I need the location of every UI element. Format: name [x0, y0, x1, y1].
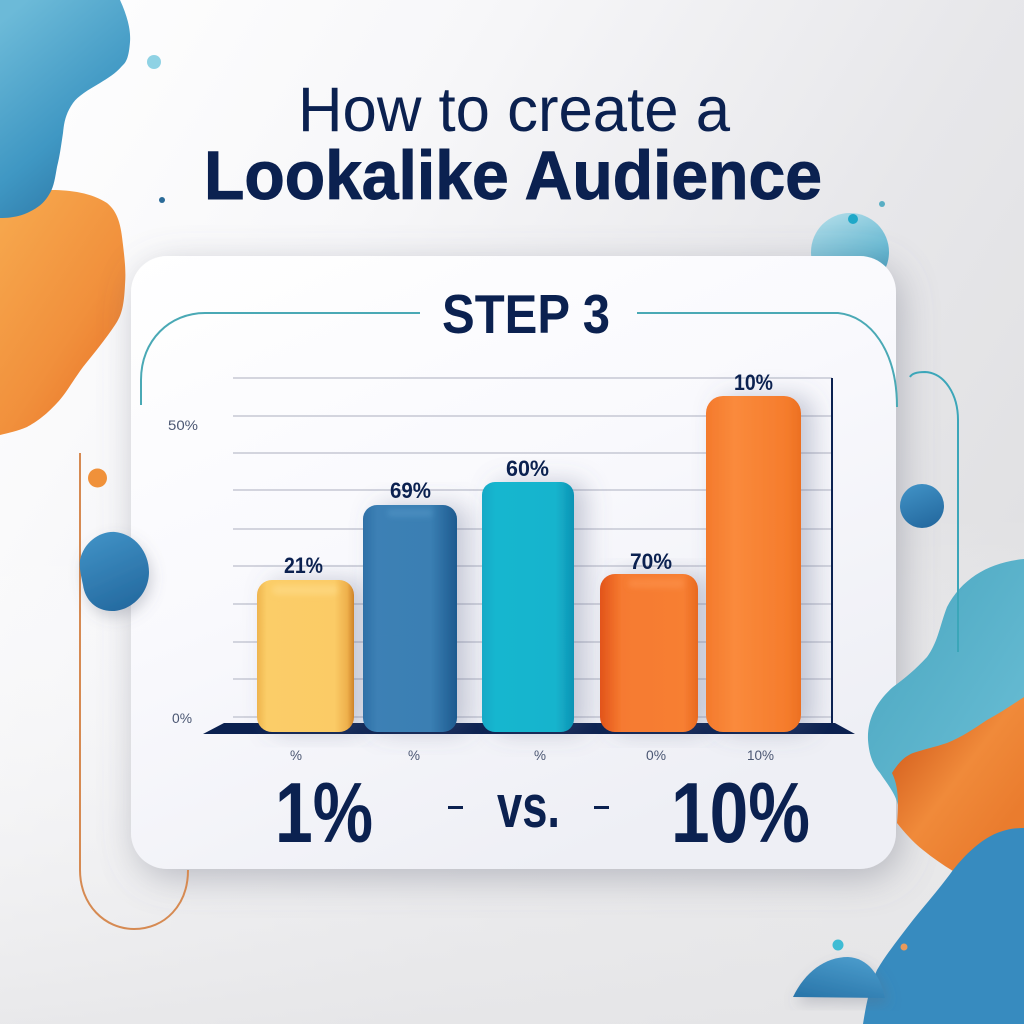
- decoration: right blue ball: [900, 484, 944, 528]
- dash left: [448, 806, 463, 809]
- decoration: blue dome: [793, 957, 885, 998]
- decoration: bottom-right orange blob: [892, 697, 1024, 871]
- chart base: [203, 723, 855, 734]
- decoration: small orange dot on blob: [900, 944, 908, 950]
- bar: blue: [363, 505, 457, 732]
- decoration: orange outline left: [80, 453, 188, 929]
- decoration: left blue pebble: [80, 532, 149, 611]
- heading: step 3: STEP 3: [442, 283, 610, 345]
- big value: 1%: 1%: [275, 766, 373, 861]
- card frame arc: right: [637, 313, 897, 407]
- x axis label 4: 0%: [646, 748, 666, 763]
- title: [204, 75, 822, 214]
- chart right axis: [831, 378, 833, 725]
- decoration: small light-blue dot: [147, 55, 161, 69]
- bar: orange tall: [706, 396, 801, 732]
- decoration: tiny teal dot: [879, 201, 885, 207]
- decoration: bottom-right blue blob: [863, 828, 1024, 1024]
- decoration: right teal outline: [910, 372, 958, 652]
- panel: main card: [131, 256, 896, 869]
- bar value: 70%: 70%: [630, 549, 672, 574]
- decoration: small orange dot: [88, 468, 107, 488]
- decoration: small navy dot: [159, 197, 165, 203]
- x axis label 1: %: [290, 748, 302, 763]
- bar: orange short: [600, 574, 698, 732]
- x axis label 2: %: [408, 748, 420, 763]
- bar value: 10%: 10%: [734, 370, 773, 395]
- decoration: teal sphere behind card: [811, 213, 889, 291]
- decoration: top-left orange blob: [0, 190, 125, 435]
- title line 1: How to create a: [298, 75, 731, 145]
- decoration: top-left blue blob: [0, 0, 130, 218]
- y axis label: 0%: 0%: [172, 711, 192, 726]
- bar value: 69%: 69%: [390, 478, 431, 503]
- comparison: 1% vs 10%: [275, 766, 810, 861]
- bar value: 60%: 60%: [506, 456, 549, 481]
- decoration: teal dot on sphere: [848, 214, 858, 224]
- big value: 10%: 10%: [671, 766, 810, 861]
- y axis label: 50%: 50%: [168, 418, 198, 433]
- card frame arc: left: [141, 313, 420, 405]
- dash right: [594, 806, 609, 809]
- x axis label 3: %: [534, 748, 546, 763]
- title line 2: Lookalike Audience: [204, 137, 822, 214]
- bar value: 21%: 21%: [284, 553, 323, 578]
- x axis label 5: 10%: [747, 748, 774, 763]
- bar: yellow: [257, 580, 354, 732]
- chart grid lines: [233, 378, 832, 717]
- decoration: bottom-right teal blob: [868, 559, 1024, 805]
- bar chart: [168, 370, 855, 763]
- vs label: vs.: [497, 773, 560, 840]
- bar: cyan: [482, 482, 574, 732]
- decoration: small cyan dot: [832, 940, 844, 950]
